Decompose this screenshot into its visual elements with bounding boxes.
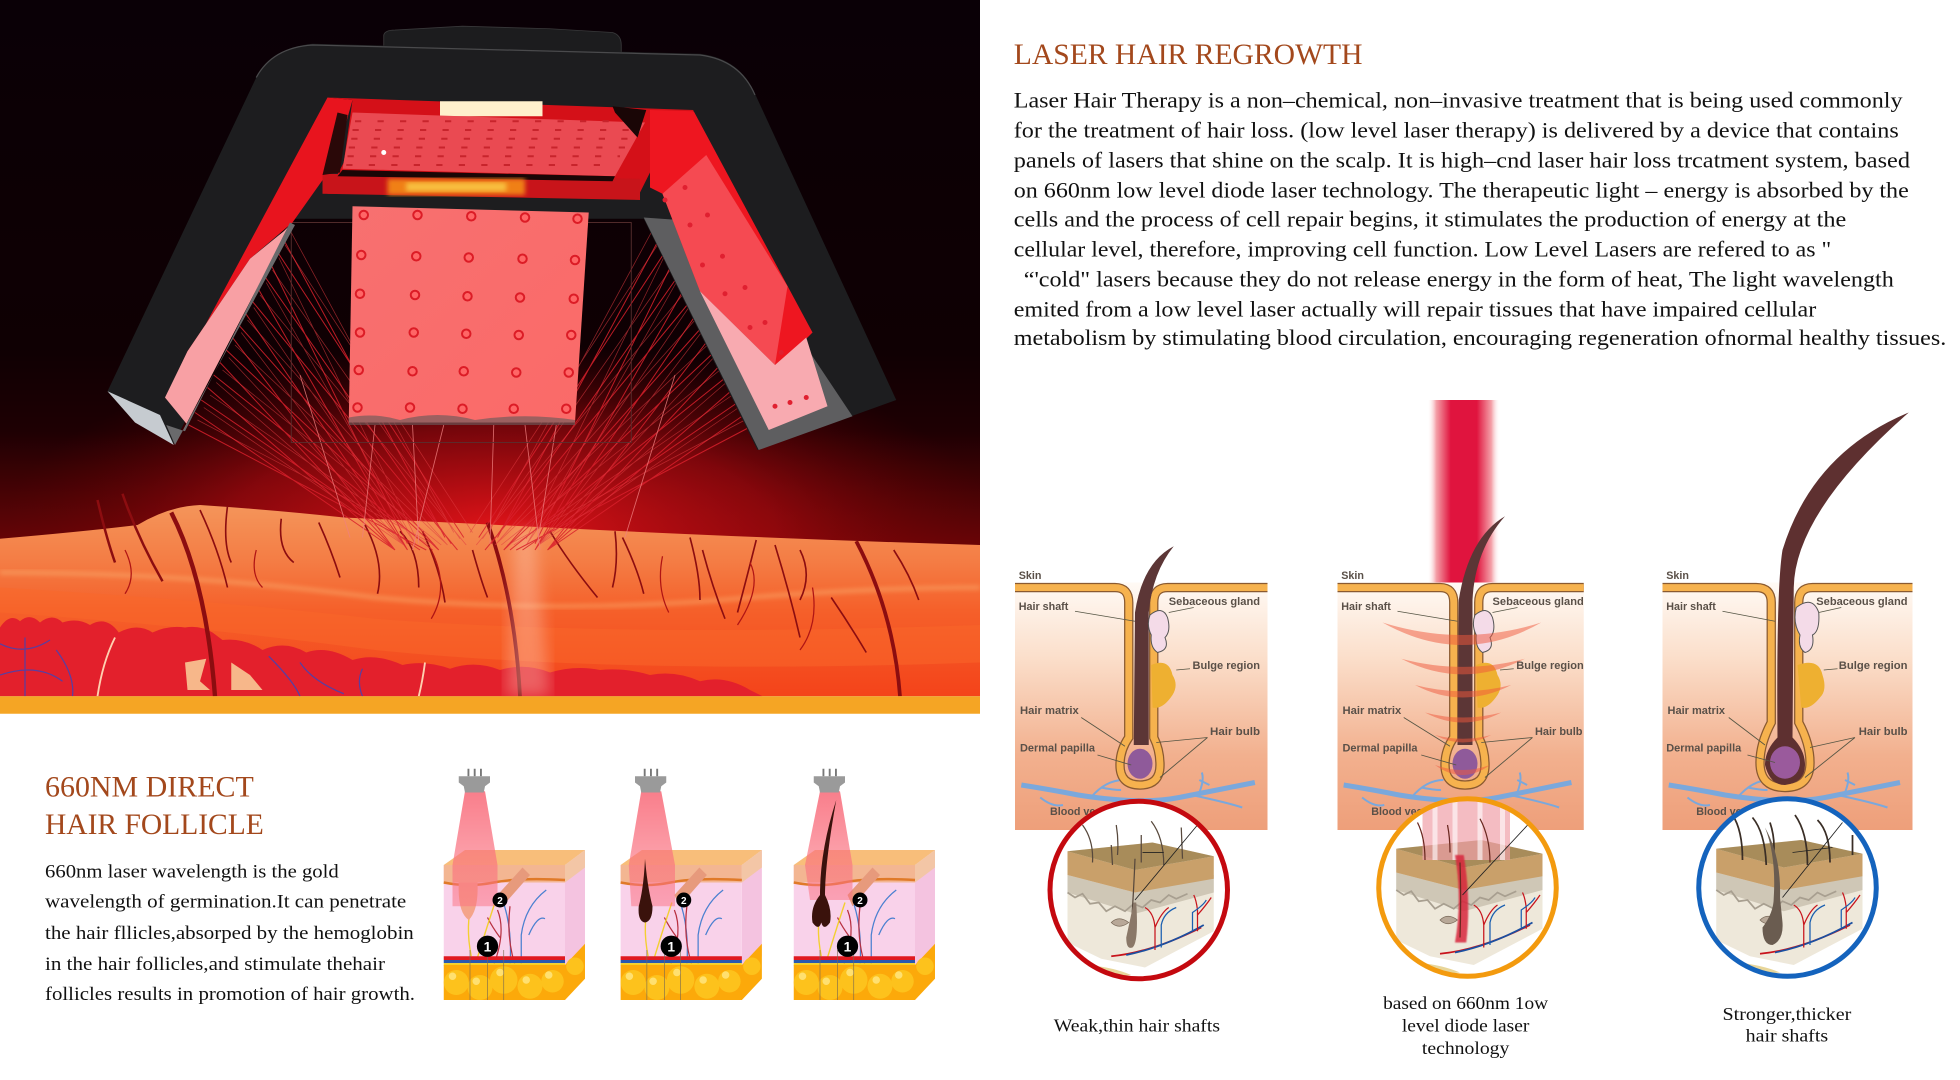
laser beam xyxy=(1428,400,1500,588)
right arm frame xyxy=(644,218,852,450)
hair 3 xyxy=(812,800,836,927)
orange divider band xyxy=(0,696,980,714)
text block: 660nm explanation: the hair fllicles,absorped by the hemoglobin xyxy=(45,923,414,944)
caption: stronger hair: Stronger,thicker xyxy=(1722,1004,1851,1024)
probe 3 xyxy=(814,769,845,792)
marker 1 xyxy=(477,936,498,957)
top inner cavity xyxy=(328,98,694,198)
follicle tube 1 xyxy=(1015,588,1268,785)
labels 1 xyxy=(1019,570,1260,818)
labels 1: Hair matrix xyxy=(1020,705,1079,717)
energy waves xyxy=(1382,622,1541,775)
panel: strong hair follicle xyxy=(1662,412,1912,830)
light strip xyxy=(440,101,542,116)
marker 2: 2 xyxy=(857,896,863,907)
text block: laser hair therapy: cellular level, therefore, improving cell function. Low Level Lasers are refered to as " xyxy=(1014,236,1831,261)
follicle tube 2 xyxy=(1338,588,1584,785)
follicle tube 3 xyxy=(1662,588,1912,788)
left arm inner face xyxy=(165,98,352,400)
labels 1: Blood vessel xyxy=(1050,806,1116,818)
caption: weak hair: Weak,thin hair shafts xyxy=(1054,1015,1220,1035)
bulge region 1 xyxy=(1151,663,1176,708)
labels 1: Bulge region xyxy=(1192,660,1260,672)
text block: laser hair therapy: cells and the process of cell repair begins, it stimulates the production of energy at the xyxy=(1014,206,1846,231)
hair shaft 3 xyxy=(1765,412,1909,785)
skin layer xyxy=(0,494,980,696)
sebaceous gland 1 xyxy=(1148,611,1169,652)
marker 1 xyxy=(661,936,682,957)
hair 2 xyxy=(639,859,652,922)
heading: 660nm direct hair follicle: HAIR FOLLICLE xyxy=(45,808,264,841)
labels 1: Hair bulb xyxy=(1210,726,1260,738)
marker 2 xyxy=(676,892,691,908)
diagram: follicle stage 3 xyxy=(794,769,935,1000)
caption: laser technology: based on 660nm 1ow xyxy=(1383,993,1548,1013)
caption: stronger hair xyxy=(1722,1004,1851,1045)
labels 1: Sebaceous gland xyxy=(1169,596,1260,608)
marker 1: 1 xyxy=(844,939,852,954)
inset: weak hair skin cross-section xyxy=(1050,801,1228,979)
labels 3: Dermal papilla xyxy=(1666,742,1742,754)
labels 2: Dermal papilla xyxy=(1342,742,1419,754)
probe 2 xyxy=(635,769,666,792)
labels 2: Hair matrix xyxy=(1342,705,1401,717)
labels 3: Hair shaft xyxy=(1666,601,1716,613)
photo: red-light helmet above scalp xyxy=(0,0,1000,719)
marker 2: 2 xyxy=(681,896,687,907)
marker 1: 1 xyxy=(484,939,492,954)
left arm end cap xyxy=(108,391,174,445)
center LED panel xyxy=(349,206,589,425)
laser rays xyxy=(188,232,748,550)
diagram: follicle stage 2 xyxy=(621,769,762,1000)
beam 1 xyxy=(452,791,498,906)
text block: laser hair therapy: panels of lasers that shine on the scalp. It is high–cnd laser hair loss trcatment system, based xyxy=(1014,148,1910,172)
marker 2 xyxy=(492,892,508,908)
labels 3: Bulge region xyxy=(1839,660,1908,672)
text block: 660nm explanation: in the hair follicles,and stimulate thehair xyxy=(45,954,386,975)
marker 1: 1 xyxy=(667,939,675,954)
bulge region 3 xyxy=(1798,663,1824,708)
inset: laser-treated skin cross-section xyxy=(1379,799,1556,976)
text block: laser hair therapy: on 660nm low level diode laser technology. The therapeutic light – energy is absorbed by the xyxy=(1014,178,1909,202)
text block: laser hair therapy: for the treatment of hair loss. (low level laser therapy) is delivered by a device that contains xyxy=(1014,118,1899,142)
labels 3 xyxy=(1666,570,1908,818)
device shell xyxy=(108,44,896,450)
panel: laser-treated hair follicle xyxy=(1338,400,1584,830)
text block: laser hair therapy: Laser Hair Therapy is a non–chemical, non–invasive treatment that is being used commonly xyxy=(1014,88,1903,112)
text block: laser hair therapy: emited from a low level laser actually will repair tissues that have impaired cellular xyxy=(1014,296,1817,321)
caption: laser technology: technology xyxy=(1422,1038,1509,1058)
text block: 660nm explanation: wavelength of germination.It can penetrate xyxy=(45,892,406,913)
heading: laser hair regrowth: LASER HAIR REGROWTH xyxy=(1014,38,1362,71)
labels 3: Skin xyxy=(1666,570,1689,582)
labels 2: Hair bulb xyxy=(1535,726,1583,738)
text block: 660nm explanation: follicles results in promotion of hair growth. xyxy=(45,984,415,1005)
caption: stronger hair: hair shafts xyxy=(1746,1025,1828,1045)
sebaceous gland 3 xyxy=(1795,602,1819,652)
beam 3 xyxy=(805,791,852,900)
panel: weak hair follicle xyxy=(1015,546,1268,830)
heading: 660nm direct hair follicle: 660NM DIRECT xyxy=(45,770,254,803)
glowing bar xyxy=(322,170,640,200)
marker 1 xyxy=(837,936,858,957)
text block: laser hair therapy: “'cold" lasers because they do not release energy in the form of heat, The light wavelength xyxy=(1024,266,1894,291)
labels 3: Hair bulb xyxy=(1859,726,1908,738)
sebaceous gland 2 xyxy=(1473,611,1494,652)
diagram: follicle stage 1 xyxy=(444,769,585,1000)
scalp hairs xyxy=(98,494,919,696)
labels 1: Skin xyxy=(1019,570,1041,582)
labels 1: Hair shaft xyxy=(1019,601,1069,613)
marker 2: 2 xyxy=(497,896,503,907)
hair shaft 2 xyxy=(1458,516,1505,745)
device handle xyxy=(384,26,621,52)
beam 2 xyxy=(629,791,675,906)
labels 1: Dermal papilla xyxy=(1020,742,1096,754)
labels 2: Hair shaft xyxy=(1341,601,1391,613)
top LED panel xyxy=(342,112,645,176)
text block: 660nm explanation: 660nm laser wavelength is the gold xyxy=(45,862,339,883)
papilla 3 xyxy=(1770,746,1800,779)
hair shaft 1 xyxy=(1134,546,1174,745)
right arm inner face xyxy=(650,110,812,365)
labels 2: Skin xyxy=(1341,570,1364,582)
labels 2: Sebaceous gland xyxy=(1492,596,1584,608)
caption: laser technology xyxy=(1383,993,1548,1058)
follicle 1 xyxy=(459,882,478,920)
bulge region 2 xyxy=(1476,663,1501,708)
labels 2: Blood vessel xyxy=(1371,806,1438,818)
probe 1 xyxy=(459,769,490,792)
papilla 1 xyxy=(1128,749,1152,779)
labels 2 xyxy=(1341,570,1584,818)
heading: 660nm direct hair follicle xyxy=(45,770,264,841)
text block: laser hair therapy xyxy=(1014,88,1946,350)
labels 3: Sebaceous gland xyxy=(1816,596,1908,608)
papilla 2 xyxy=(1452,749,1478,779)
labels 3: Hair matrix xyxy=(1668,705,1725,717)
inset: strong hair skin cross-section xyxy=(1699,799,1876,976)
marker 2 xyxy=(852,892,868,908)
text block: laser hair therapy: metabolism by stimulating blood circulation, encouraging regeneration ofnormal healthy tissues. xyxy=(1014,325,1946,350)
text block: 660nm explanation xyxy=(45,862,415,1005)
labels 2: Bulge region xyxy=(1516,660,1584,672)
caption: laser technology: level diode laser xyxy=(1402,1015,1529,1035)
labels 3: Blood vessel xyxy=(1696,806,1763,818)
